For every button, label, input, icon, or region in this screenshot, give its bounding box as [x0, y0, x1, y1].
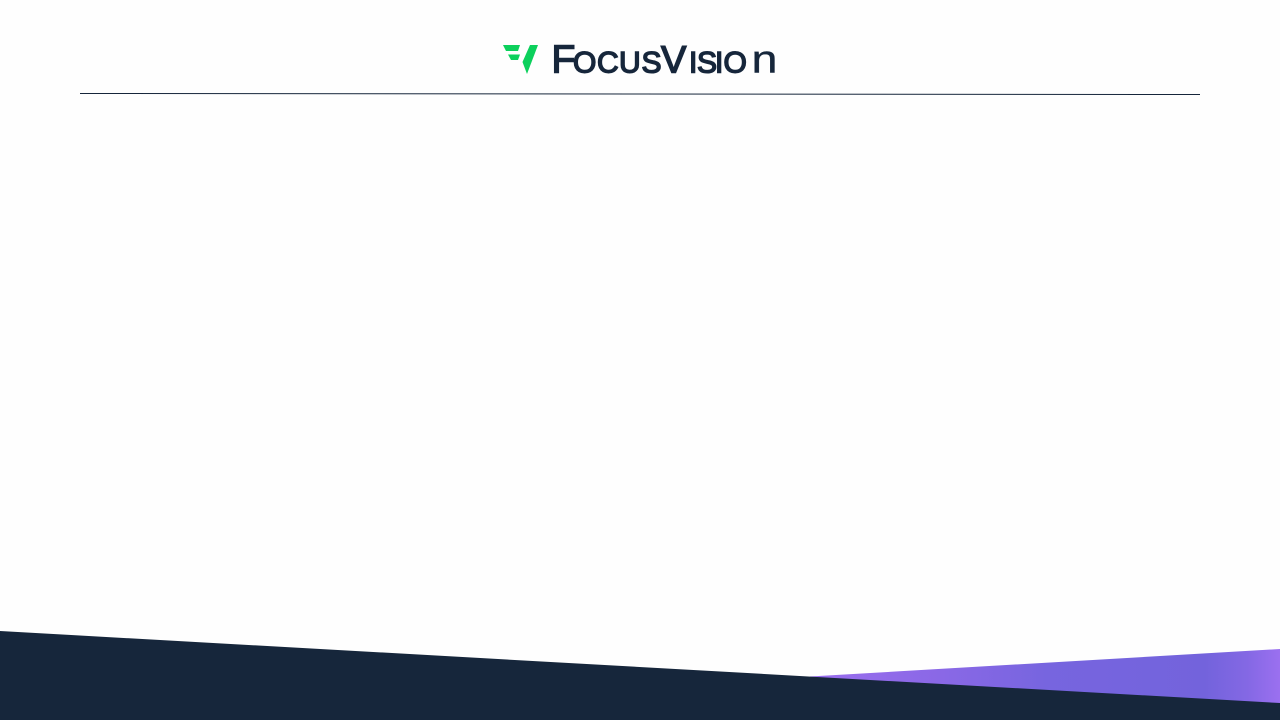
logo wordmark: O — [724, 46, 747, 80]
logo wordmark: V — [661, 40, 687, 82]
logo: FocusVision — [503, 38, 778, 82]
logo wordmark: F — [552, 38, 575, 82]
logo wordmark — [552, 38, 778, 82]
logo wordmark: S — [642, 46, 662, 80]
logo wordmark: n — [752, 38, 778, 82]
header divider line — [80, 94, 1200, 95]
logo wordmark: U — [619, 46, 641, 80]
footer: navy wedge — [0, 631, 1280, 720]
logo wordmark: C — [597, 46, 619, 80]
logo wordmark: S — [697, 46, 717, 80]
icon: green logo mark — [503, 45, 538, 74]
logo wordmark: O — [573, 46, 596, 80]
footer: purple gradient wedge — [810, 649, 1280, 704]
logo wordmark: I — [689, 46, 697, 80]
logo wordmark: I — [715, 46, 723, 80]
